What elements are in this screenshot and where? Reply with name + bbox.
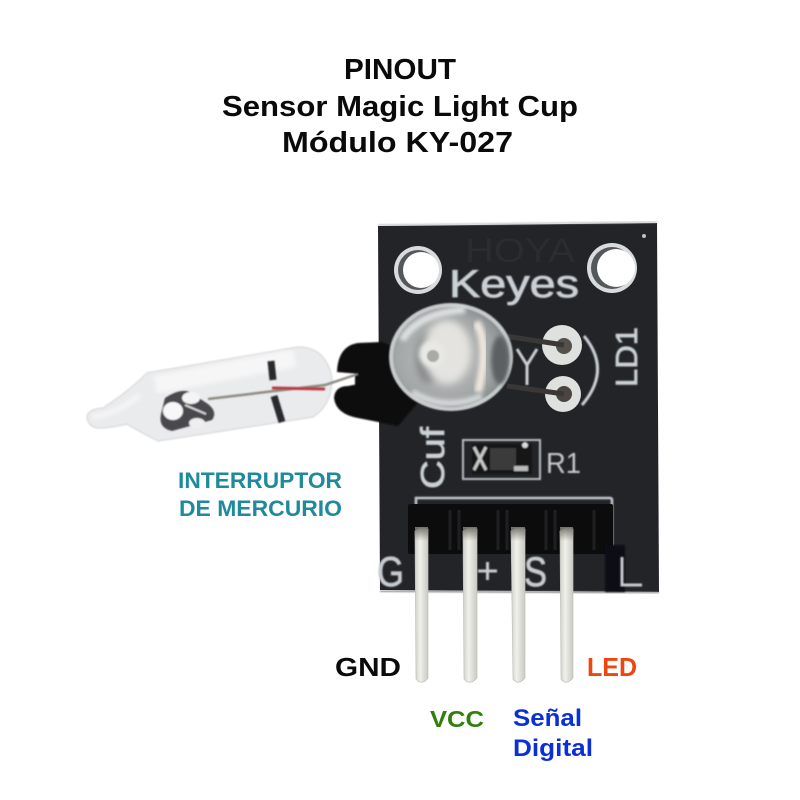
label: mercury switch: INTERRUPTOR — [178, 468, 342, 493]
electrodes and wires — [208, 361, 358, 422]
label: digital signal: Señal — [513, 705, 582, 732]
title: PINOUT — [344, 54, 456, 86]
LED pads — [505, 325, 582, 412]
title — [222, 54, 578, 159]
silkscreen: connector outline — [416, 498, 612, 549]
label: digital signal — [513, 705, 593, 762]
label: mercury switch: DE MERCURIO — [179, 496, 342, 521]
pin top shading — [415, 527, 573, 541]
circuit board — [378, 222, 659, 593]
mounting hole right — [587, 243, 637, 293]
silkscreen: R1: R1 — [546, 448, 581, 480]
label: mercury switch — [178, 468, 342, 521]
silkscreen: pin letters — [377, 548, 642, 595]
silkscreen: pin letters: S — [524, 548, 547, 595]
sensor module photo — [87, 222, 659, 682]
pin header — [408, 504, 625, 592]
LED lens — [391, 305, 511, 409]
silkscreen: pin letters: G — [377, 548, 404, 595]
label: GND: GND — [335, 652, 401, 682]
mercury switch — [87, 347, 358, 441]
board marking: HOYA: HOYA — [465, 232, 575, 270]
silkscreen: LD1: LD1 — [609, 327, 644, 387]
silkscreen: LED outline — [517, 336, 598, 405]
mercury bead — [160, 391, 214, 431]
heat-shrink sleeve — [334, 342, 420, 426]
resistor R1 — [463, 440, 540, 479]
title: Módulo KY-027 — [282, 127, 513, 159]
silkscreen: Cuf: Cuf — [414, 426, 451, 489]
glass bulb — [87, 347, 332, 441]
label: digital signal: Digital — [513, 735, 593, 762]
label: LED: LED — [587, 652, 637, 682]
title: Sensor Magic Light Cup — [222, 91, 578, 123]
mounting hole left — [394, 246, 442, 294]
pins — [415, 528, 573, 682]
label: VCC: VCC — [430, 706, 484, 732]
silkscreen: Keyes: Keyes — [449, 263, 579, 306]
